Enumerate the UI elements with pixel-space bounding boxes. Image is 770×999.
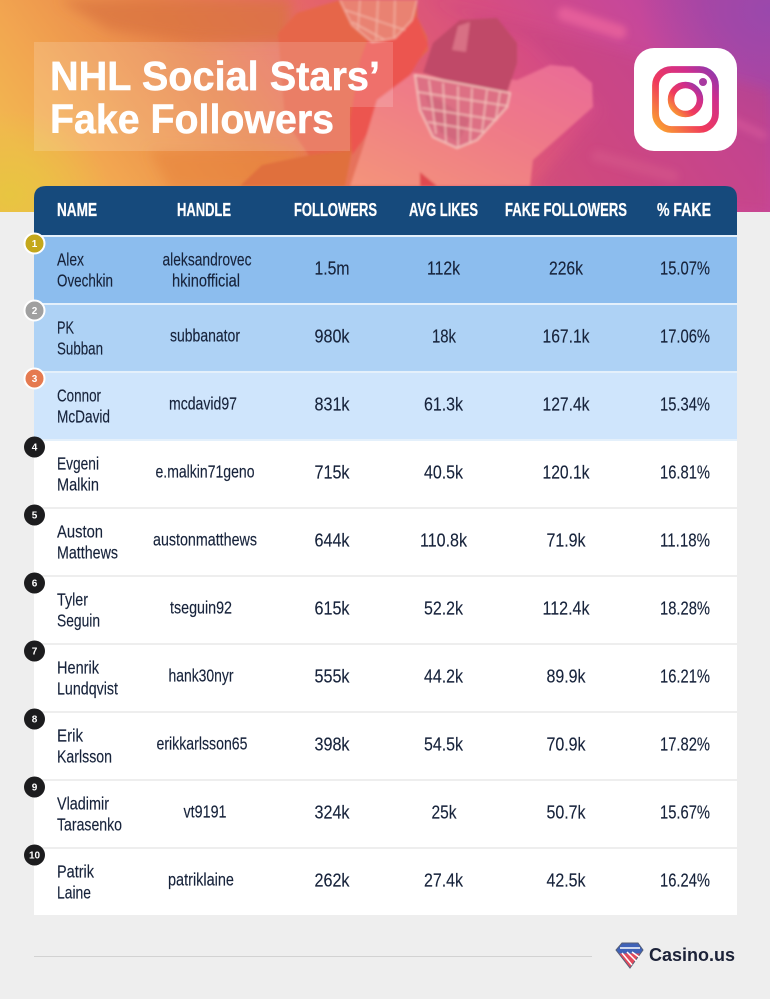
row 8: Erik Karlsson: erikkarlsson65 bbox=[156, 734, 248, 754]
row 7: Henrik Lundqvist: Lundqvist bbox=[57, 679, 118, 699]
title backing panel bbox=[34, 42, 393, 151]
row 6: Tyler Seguin bbox=[34, 577, 737, 643]
table header: AVG LIKES bbox=[409, 200, 478, 220]
row 3: Connor McDavid: 831k bbox=[314, 394, 350, 415]
table header: FOLLOWERS bbox=[294, 200, 377, 220]
icon: casino.us gem logo bbox=[616, 943, 643, 968]
row 2: PK Subban: PK bbox=[57, 318, 74, 338]
row 6: Tyler Seguin: Seguin bbox=[57, 611, 100, 631]
row 8: Erik Karlsson: 17.82% bbox=[660, 734, 710, 755]
row 3: Connor McDavid: 15.34% bbox=[660, 394, 710, 415]
row 4: Evgeni Malkin: Malkin bbox=[57, 475, 99, 495]
row 8: Erik Karlsson: 70.9k bbox=[546, 734, 586, 755]
title: NHL Social Stars’ bbox=[50, 53, 380, 99]
row 6: Tyler Seguin: 615k bbox=[314, 598, 350, 619]
title: Fake Followers bbox=[50, 96, 334, 142]
rank badges: 1 bbox=[32, 239, 38, 250]
row 5: Auston Matthews: 71.9k bbox=[546, 530, 586, 551]
row 10: Patrik Laine: 262k bbox=[314, 870, 350, 891]
row 8: Erik Karlsson: 398k bbox=[314, 734, 350, 755]
row 1: Alex Ovechkin: 226k bbox=[549, 258, 584, 279]
row 3: Connor McDavid: 61.3k bbox=[424, 394, 464, 415]
row 10: Patrik Laine: 16.24% bbox=[660, 870, 710, 891]
row 7: Henrik Lundqvist: hank30nyr bbox=[168, 666, 234, 686]
row 9: Vladimir Tarasenko: vt9191 bbox=[184, 802, 226, 822]
row 5: Auston Matthews: austonmatthews bbox=[153, 530, 257, 550]
title bbox=[34, 42, 393, 151]
row 10: Patrik Laine: Laine bbox=[57, 883, 91, 903]
row 4: Evgeni Malkin: 715k bbox=[314, 462, 350, 483]
rank badges: 5 bbox=[32, 510, 38, 522]
row 10: Patrik Laine: 42.5k bbox=[546, 870, 586, 891]
row 10: Patrik Laine: 27.4k bbox=[424, 870, 464, 891]
rank badges: 10 bbox=[29, 850, 40, 862]
row 2: PK Subban: 980k bbox=[314, 326, 350, 347]
row 4: Evgeni Malkin: 16.81% bbox=[660, 462, 710, 483]
row 1: Alex Ovechkin: aleksandrovec bbox=[162, 250, 252, 270]
row 6: Tyler Seguin: tseguin92 bbox=[170, 598, 232, 618]
row 2: PK Subban: subbanator bbox=[170, 326, 240, 346]
row 9: Vladimir Tarasenko: Vladimir bbox=[57, 794, 109, 814]
row 2: PK Subban: 17.06% bbox=[660, 326, 710, 347]
icon: instagram logo bbox=[634, 48, 737, 151]
row 10: Patrik Laine: Patrik bbox=[57, 862, 94, 882]
row 10: Patrik Laine: patriklaine bbox=[168, 870, 234, 890]
row 6: Tyler Seguin: Tyler bbox=[57, 590, 88, 610]
row 3: Connor McDavid: 127.4k bbox=[542, 394, 590, 415]
row 5: Auston Matthews: 110.8k bbox=[420, 530, 468, 551]
row 5: Auston Matthews: 11.18% bbox=[660, 530, 710, 551]
row 8: Erik Karlsson: Erik bbox=[57, 726, 83, 746]
rank badges: 7 bbox=[32, 646, 38, 658]
row 5: Auston Matthews: 644k bbox=[314, 530, 350, 551]
row 2: PK Subban bbox=[34, 305, 737, 371]
row 5: Auston Matthews bbox=[34, 509, 737, 575]
row 4: Evgeni Malkin bbox=[34, 441, 737, 507]
rank badges: 4 bbox=[32, 442, 38, 454]
rank badges: 3 bbox=[32, 374, 38, 385]
row 7: Henrik Lundqvist bbox=[34, 645, 737, 711]
row 9: Vladimir Tarasenko: 324k bbox=[314, 802, 350, 823]
row 3: Connor McDavid: mcdavid97 bbox=[169, 394, 237, 414]
row 7: Henrik Lundqvist: Henrik bbox=[57, 658, 99, 678]
rank badges: 2 bbox=[32, 306, 38, 317]
pale band behind highlighted rows bbox=[34, 235, 737, 441]
row 1: Alex Ovechkin: Alex bbox=[57, 250, 84, 270]
hero banner with hockey players bbox=[0, 0, 770, 212]
table header: FAKE FOLLOWERS bbox=[505, 200, 627, 220]
row 2: PK Subban: 167.1k bbox=[542, 326, 590, 347]
row 6: Tyler Seguin: 52.2k bbox=[424, 598, 464, 619]
row 5: Auston Matthews: Auston bbox=[57, 522, 103, 542]
row 9: Vladimir Tarasenko: 15.67% bbox=[660, 802, 710, 823]
row 7: Henrik Lundqvist: 44.2k bbox=[424, 666, 464, 687]
row 1: Alex Ovechkin: 1.5m bbox=[314, 258, 350, 279]
row 9: Vladimir Tarasenko bbox=[34, 781, 737, 847]
row 8: Erik Karlsson bbox=[34, 713, 737, 779]
row 4: Evgeni Malkin: Evgeni bbox=[57, 454, 99, 474]
row 1: Alex Ovechkin: Ovechkin bbox=[57, 271, 113, 291]
row 7: Henrik Lundqvist: 89.9k bbox=[546, 666, 586, 687]
row 6: Tyler Seguin: 18.28% bbox=[660, 598, 710, 619]
row 9: Vladimir Tarasenko: 25k bbox=[432, 802, 457, 823]
row 9: Vladimir Tarasenko: 50.7k bbox=[546, 802, 586, 823]
row 1: Alex Ovechkin bbox=[34, 237, 737, 303]
row 9: Vladimir Tarasenko: Tarasenko bbox=[57, 815, 122, 835]
row 3: Connor McDavid: Connor bbox=[57, 386, 101, 406]
row 5: Auston Matthews: Matthews bbox=[57, 543, 118, 563]
rank badges: 9 bbox=[32, 782, 38, 794]
row 4: Evgeni Malkin: 120.1k bbox=[542, 462, 590, 483]
row 8: Erik Karlsson: Karlsson bbox=[57, 747, 112, 767]
row 7: Henrik Lundqvist: 16.21% bbox=[660, 666, 710, 687]
table header: % FAKE bbox=[657, 200, 711, 220]
row 6: Tyler Seguin: 112.4k bbox=[542, 598, 590, 619]
row 8: Erik Karlsson: 54.5k bbox=[424, 734, 464, 755]
rank badges bbox=[24, 234, 45, 866]
logo wordmark: Casino.us bbox=[649, 945, 735, 965]
row 3: Connor McDavid: McDavid bbox=[57, 407, 110, 427]
table header: NAME bbox=[57, 200, 97, 220]
row 7: Henrik Lundqvist: 555k bbox=[314, 666, 350, 687]
table header: HANDLE bbox=[177, 200, 231, 220]
row 2: PK Subban: 18k bbox=[432, 326, 457, 347]
rank badges: 8 bbox=[32, 714, 38, 726]
table header bbox=[34, 186, 737, 235]
row 4: Evgeni Malkin: e.malkin71geno bbox=[156, 462, 254, 482]
row 10: Patrik Laine bbox=[34, 849, 737, 915]
row 1: Alex Ovechkin: 15.07% bbox=[660, 258, 710, 279]
row 3: Connor McDavid bbox=[34, 373, 737, 439]
row 2: PK Subban: Subban bbox=[57, 339, 103, 359]
row 1: Alex Ovechkin: hkinofficial bbox=[172, 271, 240, 291]
row 1: Alex Ovechkin: 112k bbox=[427, 258, 461, 279]
rank badges: 6 bbox=[32, 578, 38, 590]
row 4: Evgeni Malkin: 40.5k bbox=[424, 462, 464, 483]
